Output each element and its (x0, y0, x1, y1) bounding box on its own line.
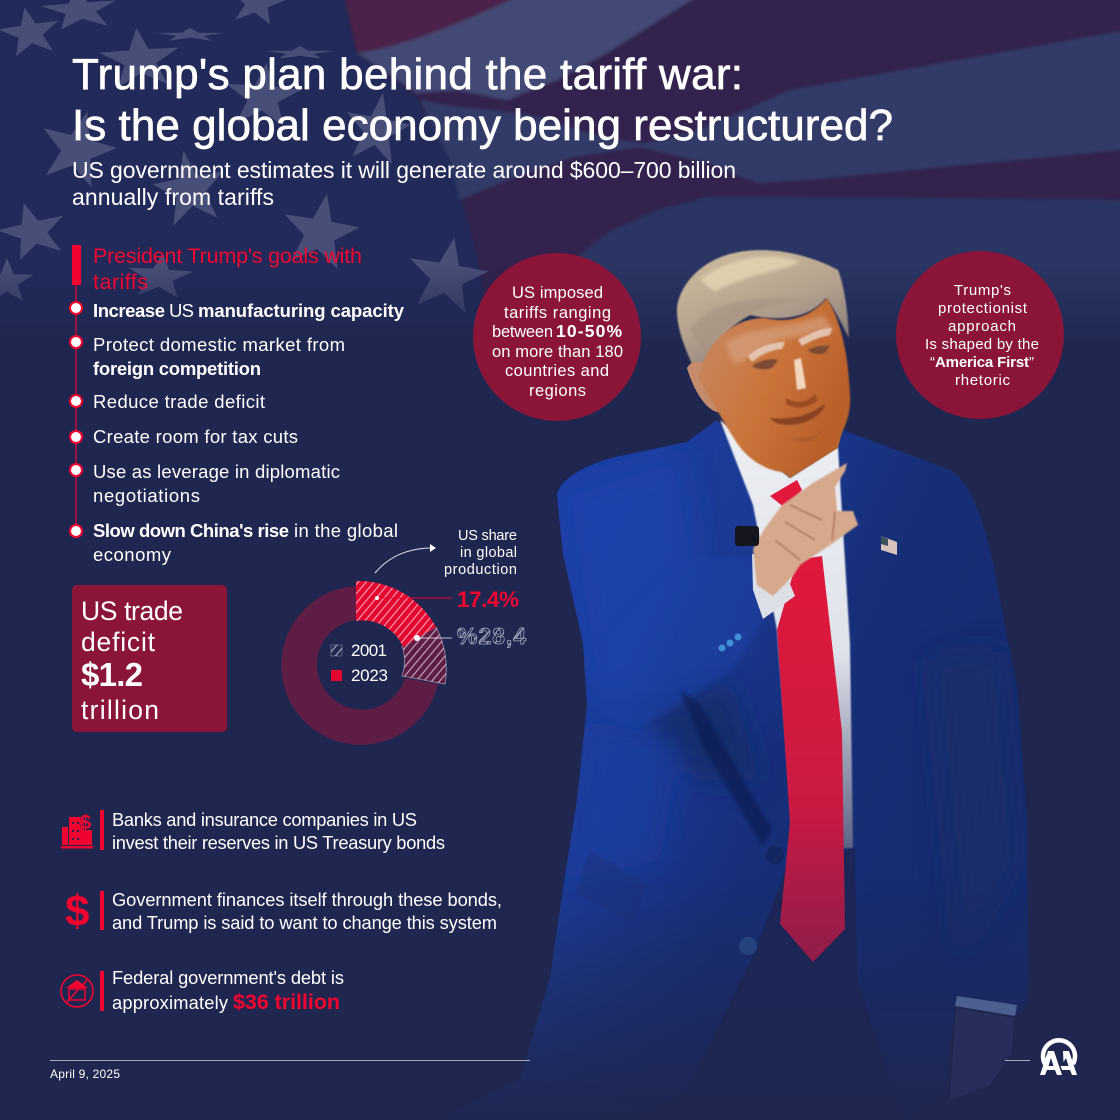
facial features (748, 328, 832, 442)
tie (777, 556, 845, 962)
lower fade (440, 906, 1028, 1120)
callout: America First circle: ” (1029, 354, 1034, 371)
neck (735, 420, 845, 478)
value 2023: 17.4% (457, 587, 519, 612)
panel: goals (70, 244, 405, 565)
row: banks: Banks and insurance companies in US (112, 809, 417, 830)
flag fade (0, 265, 1120, 350)
goals list: Increase (93, 300, 165, 321)
callout: tariffs circle (473, 253, 641, 421)
goals heading: President Trump's goals with (93, 244, 362, 268)
icon: buildings with dollar: $ (80, 812, 91, 834)
row: government finances: and Trump is said to want to change this system (112, 912, 497, 933)
trousers (704, 848, 878, 1058)
microphone (735, 526, 759, 546)
goals list: Slow down China's rise (93, 520, 289, 541)
flag canton (0, 0, 490, 340)
callout: America First circle: protectionist (938, 300, 1028, 317)
row: federal debt: approximately (112, 992, 229, 1013)
forehead sheen (725, 315, 835, 365)
goals list: manufacturing capacity (198, 300, 405, 321)
icon: dollar sign: $ (65, 887, 89, 936)
title: Is the global economy being restructured? (72, 101, 893, 150)
callout: tariffs circle: US imposed (512, 284, 603, 302)
callout: tariffs circle: countries and (505, 362, 609, 380)
goals heading: tariffs (93, 270, 148, 294)
callout: tariffs circle: between (492, 323, 553, 341)
callout: tariffs circle: tariffs ranging (504, 304, 611, 322)
legend: 2001 (351, 641, 387, 660)
row: banks (61, 809, 445, 853)
goals timeline (70, 285, 82, 537)
shirt (720, 420, 853, 848)
goals list: Reduce trade deficit (93, 391, 265, 412)
title: Trump's plan behind the tariff war: (72, 50, 743, 99)
suit jacket (430, 400, 1050, 1120)
callout: America First circle: approach (948, 318, 1016, 335)
sleeve buttons (718, 634, 742, 652)
callout: America First circle: America First (935, 354, 1029, 371)
row: government finances: Government finances itself through these bonds, (112, 889, 502, 910)
goals list: negotiations (93, 485, 200, 506)
chart label: US share (458, 528, 517, 544)
right cuff (955, 996, 1017, 1016)
chart label (444, 528, 517, 578)
chart: donut of US share in global production (281, 528, 526, 745)
row: banks: invest their reserves in US Treasury bonds (112, 832, 445, 853)
icon: AA logo (1040, 1040, 1077, 1075)
date: April 9, 2025 (50, 1067, 120, 1081)
callout: tariffs circle: regions (529, 382, 586, 400)
arm sleeve (622, 558, 762, 726)
footer (50, 1040, 1077, 1081)
subtitle (72, 157, 736, 210)
cuff (752, 554, 795, 619)
chart label: in global (460, 545, 517, 561)
goals list (93, 300, 405, 565)
callout: tariffs circle: 10-50% (556, 321, 622, 341)
lapel shadow (680, 690, 772, 845)
red 2023 wedge (356, 581, 436, 647)
callout: America First circle: Is shaped by the (925, 336, 1039, 353)
hand (753, 463, 858, 596)
callout: trade deficit (72, 585, 227, 732)
jacket buttons (766, 846, 784, 864)
goals list: foreign competition (93, 358, 261, 379)
callout: America First circle: rhetoric (955, 372, 1010, 389)
hatched 2001 wedge (402, 627, 446, 684)
face (698, 298, 850, 472)
flag stars (0, 0, 494, 315)
tie knot (770, 480, 802, 508)
goals heading (72, 244, 362, 294)
donut ring (281, 586, 438, 745)
goals list: Use as leverage in diplomatic (93, 461, 340, 482)
callout: trade deficit: trillion (81, 695, 159, 725)
suit sheen (584, 466, 957, 858)
icon: crossed-out bank (61, 975, 93, 1007)
photo: Trump pointing (430, 250, 1050, 1120)
flag pin (881, 536, 897, 555)
callout: America First circle: Trump's (954, 282, 1011, 299)
row: federal debt (61, 967, 344, 1014)
arrow (375, 544, 436, 573)
icon: buildings with dollar (61, 812, 93, 848)
callout: America First circle (896, 251, 1064, 419)
callout: America First circle: “ (930, 354, 935, 371)
legend (331, 641, 388, 685)
chart label: production (444, 562, 517, 578)
goals list: in the global (294, 520, 398, 541)
ear (687, 362, 722, 412)
right hand (950, 1008, 1014, 1100)
row: federal debt: Federal government's debt is (112, 967, 344, 988)
row: government finances (65, 887, 502, 936)
hand shading (775, 505, 835, 560)
goals list: economy (93, 544, 172, 565)
flag stripes (343, 0, 1120, 345)
row: federal debt: $36 trillion (233, 990, 340, 1014)
callout: trade deficit: deficit (81, 627, 156, 657)
goals list: Create room for tax cuts (93, 426, 298, 447)
title (72, 50, 893, 150)
callout: trade deficit: US trade (81, 596, 183, 626)
subtitle: US government estimates it will generate around $600–700 billion (72, 157, 736, 183)
callout: trade deficit: $1.2 (81, 656, 143, 693)
hair (677, 250, 849, 378)
callout: tariffs circle: on more than 180 (492, 343, 623, 361)
leader lines (375, 596, 452, 641)
goals list: Protect domestic market from (93, 334, 345, 355)
hair highlights (700, 256, 800, 292)
goals list: US (169, 300, 194, 321)
legend: 2023 (351, 666, 388, 685)
value 2001: %28,4 (457, 623, 526, 649)
pocket flap (575, 850, 647, 924)
subtitle: annually from tariffs (72, 184, 274, 210)
